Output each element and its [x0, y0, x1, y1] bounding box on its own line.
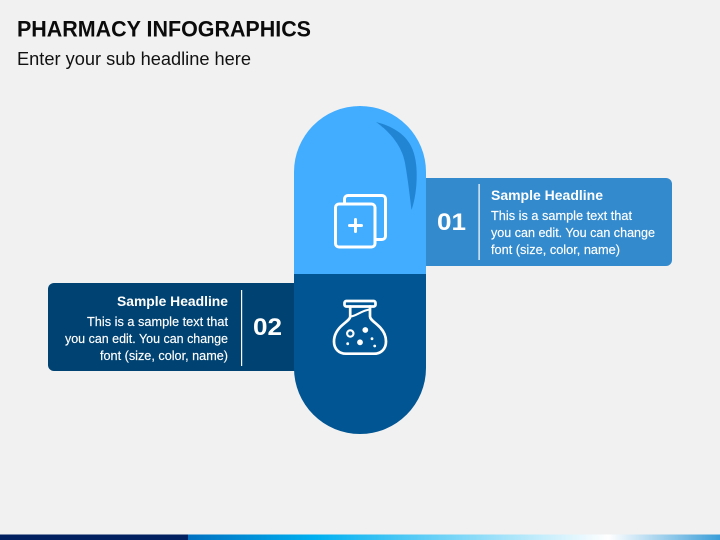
title: PHARMACY INFOGRAPHICS	[17, 16, 311, 42]
body text 02: font (size, color, name)	[100, 349, 228, 363]
body text 01: This is a sample text that	[491, 209, 633, 223]
headline 01: Sample Headline	[491, 188, 604, 203]
icon: flask with bubbles	[334, 301, 386, 354]
capsule highlight	[376, 122, 417, 210]
number 02: 02	[253, 314, 282, 341]
number 01: 01	[437, 209, 466, 236]
subtitle: Enter your sub headline here	[17, 49, 251, 69]
panel: 02 callout	[48, 283, 300, 371]
body text 02	[65, 315, 229, 363]
body text 02: This is a sample text that	[87, 315, 229, 329]
capsule top half	[294, 106, 426, 274]
footer bar	[0, 534, 720, 540]
capsule bottom half	[294, 274, 426, 434]
capsule	[294, 106, 426, 434]
headline 02: Sample Headline	[117, 294, 228, 309]
body text 01	[491, 209, 655, 257]
body text 01: font (size, color, name)	[491, 243, 620, 257]
body text 02: you can edit. You can change	[65, 332, 228, 346]
panel: 01 callout	[420, 178, 672, 266]
icon: documents with plus	[336, 196, 386, 247]
body text 01: you can edit. You can change	[491, 226, 655, 240]
